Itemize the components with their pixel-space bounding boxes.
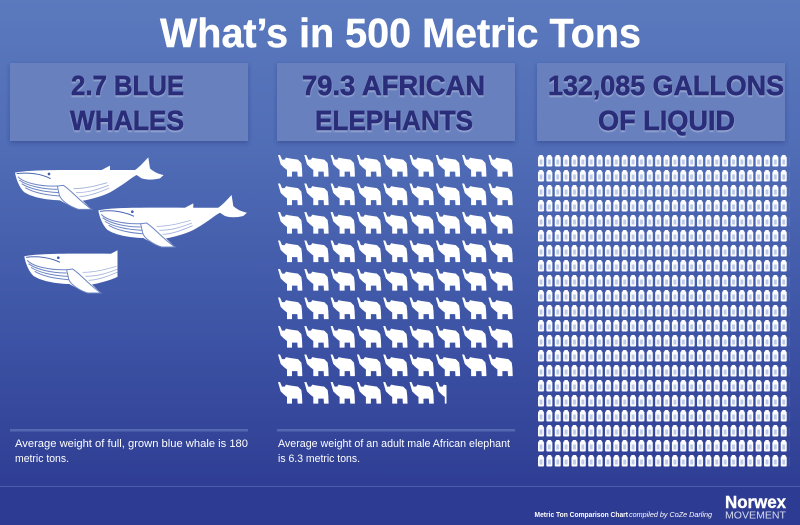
logo: Norwex Movement: MOVEMENT bbox=[725, 510, 787, 522]
panel: gallons heading bbox=[537, 63, 785, 141]
footer credit bbox=[534, 510, 713, 519]
footer band bbox=[0, 486, 800, 525]
text: elephant note: Average weight of an adult male African elephant bbox=[278, 438, 510, 450]
whale pictogram bbox=[15, 157, 247, 293]
logo: Norwex Movement bbox=[725, 492, 787, 522]
elephant pictogram bbox=[278, 155, 513, 404]
rule: elephant note bbox=[277, 429, 515, 432]
text: whale note: Average weight of full, grown blue whale is 180 bbox=[15, 438, 248, 450]
panel: gallons heading: OF LIQUID bbox=[598, 105, 735, 136]
text: whale note bbox=[15, 438, 248, 465]
text: elephant note bbox=[278, 438, 510, 465]
text: whale note: metric tons. bbox=[15, 453, 69, 465]
footer credit: Metric Ton Comparison Chart bbox=[534, 510, 628, 519]
panel: blue whales heading bbox=[10, 63, 248, 141]
panel: gallons heading: 132,085 GALLONS bbox=[548, 70, 784, 101]
logo: Norwex Movement: Norwex bbox=[725, 492, 786, 512]
rule: whale note bbox=[10, 429, 248, 432]
footer credit: compiled by CoZe Darling bbox=[629, 510, 713, 519]
liquid jug pictogram bbox=[538, 155, 789, 470]
panel: African elephants heading: ELEPHANTS bbox=[315, 105, 473, 136]
panel: African elephants heading bbox=[277, 63, 515, 141]
panel: African elephants heading: 79.3 AFRICAN bbox=[302, 70, 485, 101]
panel: blue whales heading: WHALES bbox=[70, 105, 184, 136]
panel: blue whales heading: 2.7 BLUE bbox=[71, 70, 184, 101]
text: elephant note: is 6.3 metric tons. bbox=[278, 453, 360, 465]
title: What’s in 500 Metric Tons bbox=[160, 10, 641, 56]
